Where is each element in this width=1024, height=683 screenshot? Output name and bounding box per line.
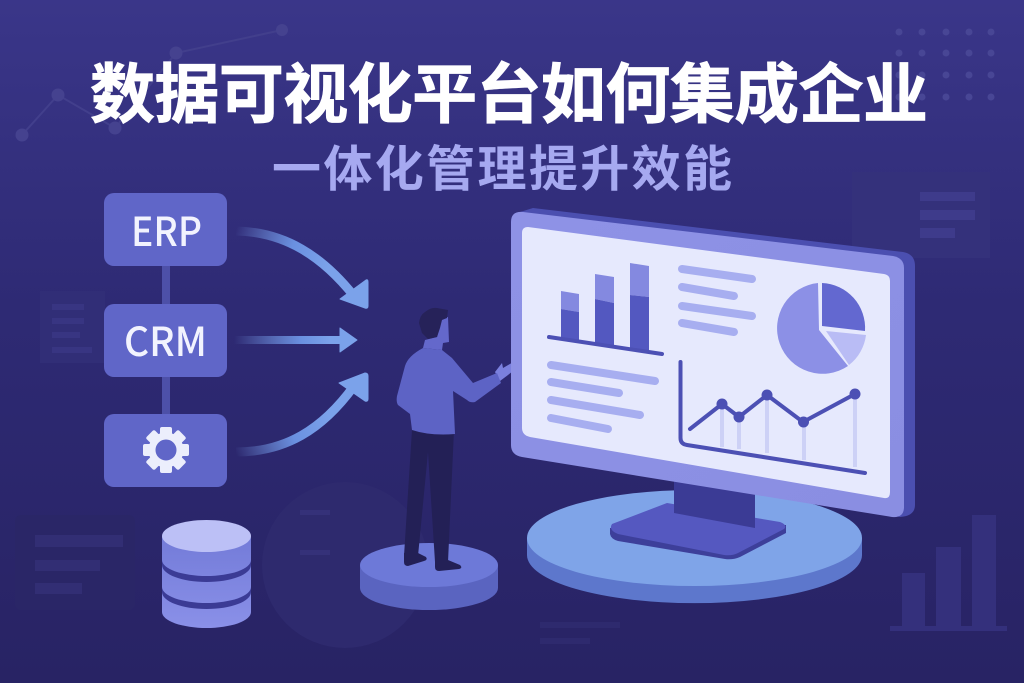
screen text lines left <box>551 365 655 429</box>
monitor platform disc <box>527 490 862 603</box>
decorative faint line chart top left <box>16 24 288 142</box>
arrow: CRM to person <box>234 328 357 352</box>
monitor stand <box>610 480 786 559</box>
arrow: ERP to person <box>236 231 368 308</box>
person figure <box>397 308 519 571</box>
person right shoe <box>435 560 461 571</box>
decorative dot grid top right <box>896 28 994 100</box>
screen line chart <box>680 362 865 473</box>
box: ERP: ERP <box>131 200 202 258</box>
arrow: settings to person <box>236 373 368 452</box>
icon: database cylinder <box>162 520 251 628</box>
person pedestal <box>360 543 498 610</box>
screen text lines top <box>682 269 752 332</box>
person legs <box>404 430 454 562</box>
decorative faint panel left <box>40 291 105 363</box>
decorative faint circle behind person <box>262 482 428 648</box>
title: 数据可视化平台如何集成企业 <box>90 58 928 131</box>
screen pie chart <box>777 283 866 374</box>
decorative faint bars bottom centre <box>540 622 620 644</box>
monitor bezel <box>511 212 904 517</box>
box: ERP <box>104 193 227 266</box>
monitor <box>511 208 915 517</box>
person neck and face <box>423 317 449 350</box>
connector lines between systems <box>162 262 170 419</box>
person hand <box>495 361 519 381</box>
screen bar chart <box>549 263 662 354</box>
box: settings gear <box>104 414 227 487</box>
person left shoe <box>404 553 427 566</box>
subtitle: 一体化管理提升效能 <box>272 143 732 197</box>
decorative faint bar chart bottom right <box>890 515 1007 631</box>
decorative faint panel right <box>852 172 990 258</box>
monitor back edge <box>520 208 915 517</box>
box: CRM: CRM <box>124 310 207 368</box>
monitor screen <box>522 227 890 498</box>
box: CRM <box>104 304 227 377</box>
person hair <box>419 308 448 339</box>
person sweater and arm <box>397 348 501 434</box>
icon: gear <box>143 427 189 473</box>
decorative faint panel bottom left <box>15 515 135 610</box>
